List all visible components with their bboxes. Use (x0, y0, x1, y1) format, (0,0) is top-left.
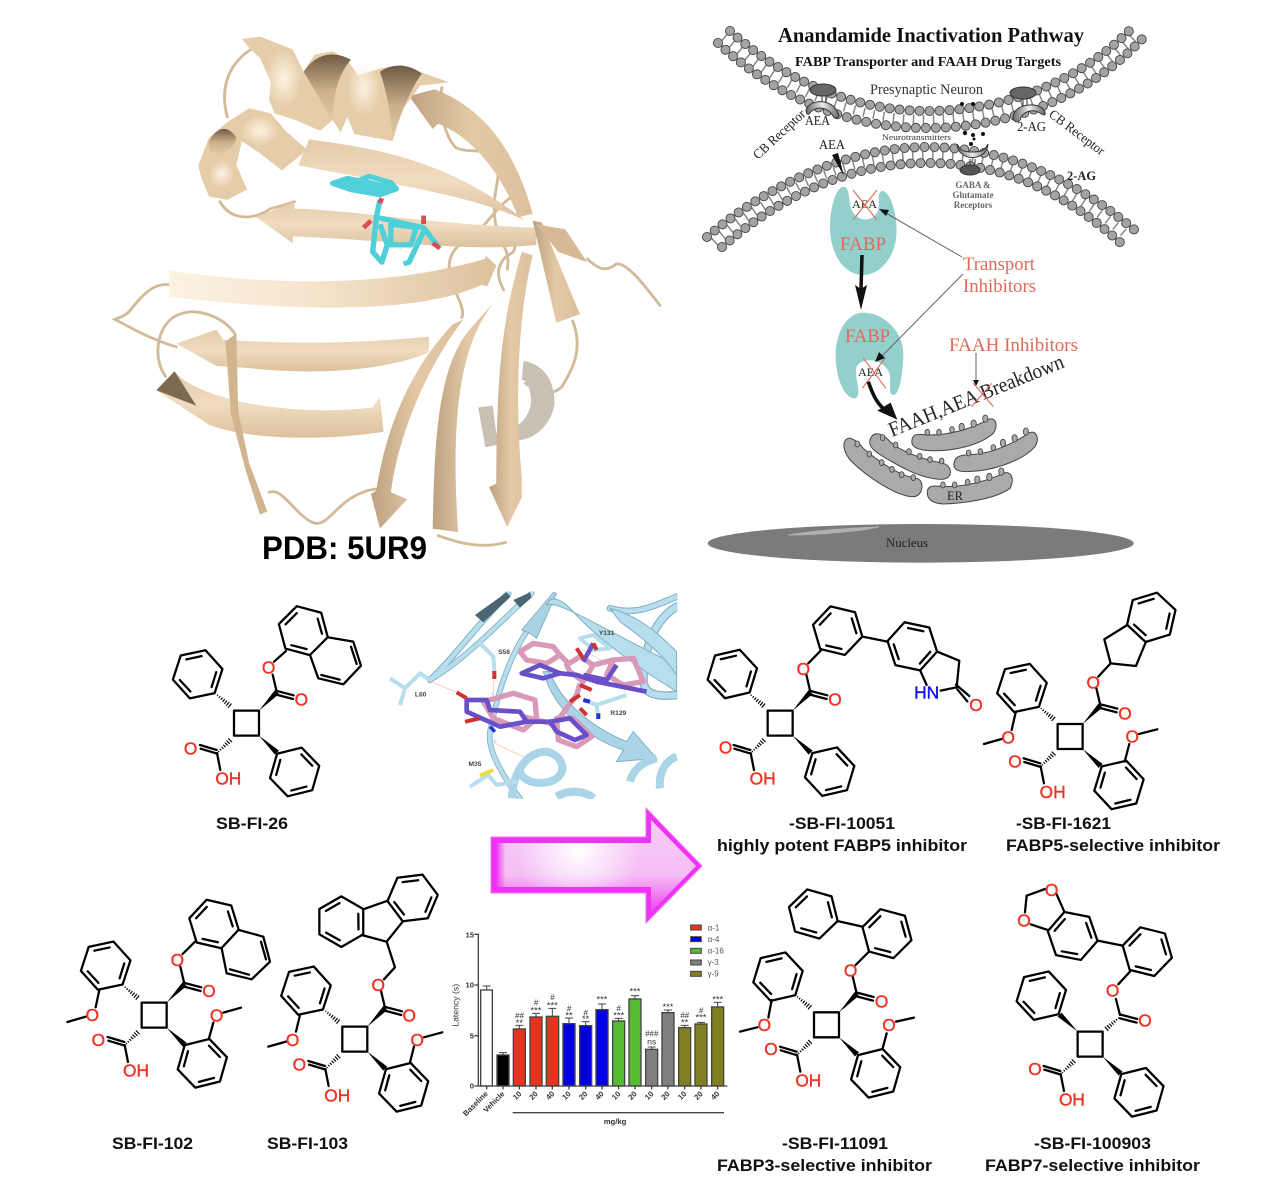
FABP carrier, AEA bound at bottom (836, 313, 903, 398)
molecule: SB-FI-26: O (262, 658, 275, 678)
label: AEA left: AEA (805, 113, 830, 128)
molecule: SB-FI-100903: O (1045, 880, 1058, 900)
panel: docking view, proteins with ligands: M35 (469, 761, 482, 768)
chart: latency bar chart: 40 (709, 1089, 721, 1102)
molecule: SB-FI-102: OH (123, 1060, 149, 1080)
alpha helix, main (242, 37, 449, 141)
axis labels: 10 (465, 981, 474, 990)
axes (474, 934, 727, 1113)
molecule: SB-FI-102: O (210, 1006, 223, 1026)
label: SB-FI-10051: highly potent FABP5 inhibitor (717, 837, 968, 855)
error bars (483, 986, 722, 1055)
chart: latency bar chart: 20 (527, 1089, 540, 1102)
molecule: SB-FI-1621: O (1087, 673, 1100, 693)
chart: latency bar chart: 10 (560, 1089, 573, 1102)
molecule: SB-FI-11091: O (764, 1039, 778, 1059)
molecule: SB-FI-103: O (411, 1030, 424, 1050)
pink ligand (483, 643, 643, 747)
significance marks: # (616, 1004, 621, 1013)
label: ER: ER (947, 489, 964, 503)
label: GABA and glutamate receptors: GABA & (955, 180, 991, 190)
molecule: SB-FI-103: O (286, 1030, 299, 1050)
panel: docking view, proteins with ligands: R129 (610, 710, 627, 717)
significance marks: ## (515, 1012, 524, 1021)
title: Anandamide Inactivation Pathway (778, 23, 1084, 47)
label: transport inhibitors: Transport (963, 254, 1036, 275)
molecule: SB-FI-103: O (403, 1006, 416, 1026)
molecule: SB-FI-10051: O (828, 689, 842, 709)
molecule: SB-FI-103: OH (324, 1085, 350, 1105)
molecule: SB-FI-100903: O (1106, 981, 1119, 1001)
molecule: SB-FI-100903: O (1028, 1059, 1042, 1079)
label: SB-FI-100903: -SB-FI-100903 (1034, 1135, 1151, 1153)
molecule: SB-FI-10051 (703, 597, 983, 805)
legend: α-1 (708, 923, 720, 932)
molecule: SB-FI-1621: O (1126, 727, 1139, 747)
molecule: SB-FI-1621: O (1002, 727, 1015, 747)
significance marks: *** (547, 1001, 558, 1011)
purple ligand (467, 643, 647, 740)
chart: latency bar chart: 20 (626, 1089, 639, 1102)
postsynaptic membrane (707, 147, 1137, 247)
molecule: SB-FI-10051: O (797, 659, 810, 679)
label: neurotransmitters: Neurotransmitters (882, 132, 951, 142)
receptor: right CB (1010, 87, 1045, 122)
molecule: SB-FI-26 (168, 597, 361, 805)
residue sticks (390, 635, 627, 787)
significance marks: *** (630, 986, 641, 996)
arrow: inhibitors to lower FABP (875, 274, 963, 362)
arrow: FABP transport (855, 255, 867, 310)
molecule: SB-FI-11091 (740, 881, 920, 1107)
significance marks: *** (613, 1010, 624, 1020)
chart: latency bar chart: 20 (577, 1089, 589, 1102)
panel: protein ribbon structure (115, 37, 660, 545)
label: AEA above membrane: AEA (819, 137, 845, 152)
significance marks: # (534, 998, 539, 1007)
molecule: SB-FI-100903: O (1138, 1010, 1152, 1030)
molecule: SB-FI-1621: O (1008, 752, 1022, 772)
molecule: SB-FI-11091: O (882, 1015, 896, 1035)
legend: γ-9 (708, 969, 719, 978)
significance marks: ### (645, 1030, 659, 1039)
chart: latency bar chart: 10 (676, 1089, 688, 1102)
arrow: AEA to FAAH (868, 382, 897, 420)
molecule: SB-FI-26: OH (215, 769, 241, 789)
legend: α-16 (708, 946, 724, 955)
chart: latency bar chart: 20 (659, 1089, 672, 1102)
significance marks: *** (712, 995, 723, 1005)
molecule: SB-FI-10051: O (719, 738, 732, 758)
FABP carrier, AEA bound at bottom: AEA (858, 365, 883, 379)
label: SB-FI-11091: -SB-FI-11091 (782, 1135, 888, 1153)
axis labels: 15 (465, 930, 475, 939)
significance marks: # (583, 1008, 588, 1017)
molecule: SB-FI-26: O (184, 738, 197, 758)
panel: docking view, proteins with ligands: Y131 (599, 630, 615, 637)
significance marks: # (567, 1005, 572, 1014)
label: right CB receptor: CB Receptor (1046, 106, 1108, 158)
molecule: SB-FI-10051: OH (750, 769, 776, 789)
FABP carrier, AEA bound at top: FABP (840, 234, 886, 255)
chart: latency bar chart: mg/kg (604, 1117, 627, 1126)
FABP carrier, AEA bound at bottom: FABP (845, 326, 890, 347)
arrow: FAAH inhibitor (973, 353, 979, 386)
label: SB-FI-103: SB-FI-103 (267, 1135, 348, 1153)
molecule: SB-FI-103: O (372, 975, 385, 995)
arrow: AEA entry (832, 153, 844, 176)
label: SB-FI-100903: FABP7-selective inhibitor (985, 1157, 1201, 1175)
nucleus (708, 524, 1134, 563)
chart: latency bar chart: 40 (544, 1089, 556, 1102)
significance marks: ns (647, 1036, 657, 1046)
endoplasmic reticulum (844, 415, 1037, 504)
significance marks: ** (516, 1018, 523, 1028)
caption: PDB id: PDB: 5UR9 (262, 530, 427, 566)
axis labels: 0 (470, 1082, 474, 1091)
chart: latency bar chart: 20 (692, 1089, 705, 1102)
legend (691, 923, 724, 978)
legend: α-4 (708, 935, 720, 944)
significance marks: *** (663, 1002, 674, 1012)
FABP carrier, AEA bound at top (830, 187, 897, 275)
molecule: SB-FI-10051: O (969, 695, 983, 715)
axis labels (465, 930, 475, 1091)
molecule: SB-FI-102: O (202, 981, 216, 1001)
subtitle: FABP Transporter and FAAH Drug Targets (795, 55, 1062, 70)
chart: latency bar chart: 10 (643, 1089, 655, 1102)
bars (481, 990, 724, 1086)
molecule: SB-FI-103 (268, 873, 442, 1121)
presynaptic membrane (718, 30, 1143, 128)
panel: docking view, proteins with ligands (390, 592, 677, 798)
molecule: SB-FI-11091: O (758, 1015, 771, 1035)
arrow: inhibitors to upper FABP (879, 209, 962, 257)
label: transport inhibitors: Inhibitors (963, 276, 1036, 297)
molecule: SB-FI-1621: O (1118, 703, 1132, 723)
molecule: SB-FI-1621: OH (1040, 782, 1066, 802)
molecule: SB-FI-10051: HN (914, 683, 939, 703)
label: 2-AG upper: 2-AG (1017, 119, 1046, 134)
molecule: SB-FI-11091: OH (795, 1071, 821, 1091)
panel: docking view, proteins with ligands: L60 (415, 692, 427, 699)
protein ribbons (430, 593, 677, 798)
chart: latency bar chart (451, 923, 727, 1126)
red cross over breakdown (972, 383, 993, 407)
label: FAAH AEA breakdown: FAAH,AEA Breakdown (885, 349, 1068, 442)
molecule: SB-FI-1621 (984, 589, 1182, 818)
receptor: GABA and glutamate (957, 144, 988, 175)
chart: latency bar chart: 40 (593, 1089, 606, 1102)
significance marks (515, 986, 723, 1046)
molecule: SB-FI-100903 (1012, 880, 1181, 1126)
panel: anandamide inactivation pathway (707, 23, 1143, 563)
significance marks: ** (582, 1014, 590, 1024)
arrow: magenta right arrow (491, 808, 702, 923)
molecule: SB-FI-103: O (293, 1054, 306, 1074)
ligand: cyan stick molecule (333, 176, 440, 264)
significance marks: ** (681, 1017, 689, 1027)
nucleus: Nucleus (886, 535, 928, 550)
molecule: SB-FI-11091: O (875, 992, 888, 1012)
significance marks: *** (597, 995, 608, 1005)
label: presynaptic neuron: Presynaptic Neuron (870, 82, 983, 98)
label: 2-AG lower: 2-AG (1067, 169, 1096, 183)
label: GABA and glutamate receptors: Glutamate (952, 190, 994, 200)
significance marks: # (550, 993, 555, 1002)
label: SB-FI-11091: FABP3-selective inhibitor (717, 1157, 933, 1175)
chart: latency bar chart: Baseline (461, 1089, 490, 1118)
molecule: SB-FI-102: O (171, 950, 184, 970)
chart: latency bar chart: 10 (511, 1089, 523, 1102)
chart: latency bar chart: Latency (s) (451, 984, 461, 1027)
legend: γ-3 (708, 958, 719, 967)
chart: latency bar chart: 10 (610, 1089, 622, 1102)
significance marks: # (699, 1006, 704, 1015)
alpha helix, small (198, 108, 307, 200)
molecule: SB-FI-100903: O (1017, 911, 1031, 931)
molecule: SB-FI-102: O (86, 1005, 99, 1025)
label: left CB receptor: CB Receptor (750, 106, 809, 162)
significance marks: ## (680, 1011, 690, 1020)
panel: docking view, proteins with ligands: S58 (498, 649, 510, 656)
molecule: SB-FI-102 (67, 891, 270, 1097)
FABP carrier, AEA bound at top: AEA (852, 197, 877, 211)
molecule: SB-FI-102: O (92, 1030, 105, 1050)
label: SB-FI-26: SB-FI-26 (216, 815, 288, 833)
neurotransmitter dots (960, 102, 985, 146)
label: SB-FI-102: SB-FI-102 (112, 1135, 193, 1153)
label: SB-FI-1621: -SB-FI-1621 (1016, 815, 1111, 833)
molecule: SB-FI-26: O (295, 689, 308, 709)
chart: latency bar chart: Vehicle (481, 1089, 506, 1114)
label: SB-FI-10051: -SB-FI-10051 (789, 815, 895, 833)
label: SB-FI-1621: FABP5-selective inhibitor (1006, 837, 1221, 855)
significance marks: *** (531, 1005, 542, 1015)
label: GABA and glutamate receptors: Receptors (954, 200, 993, 210)
molecule: SB-FI-100903: OH (1059, 1090, 1085, 1110)
axis labels: 5 (470, 1031, 475, 1040)
molecule: SB-FI-11091: O (844, 961, 857, 981)
receptor: left CB (806, 84, 839, 118)
significance marks: ** (565, 1011, 573, 1021)
label: FAAH inhibitors: FAAH Inhibitors (949, 335, 1078, 356)
significance marks: *** (696, 1013, 707, 1023)
